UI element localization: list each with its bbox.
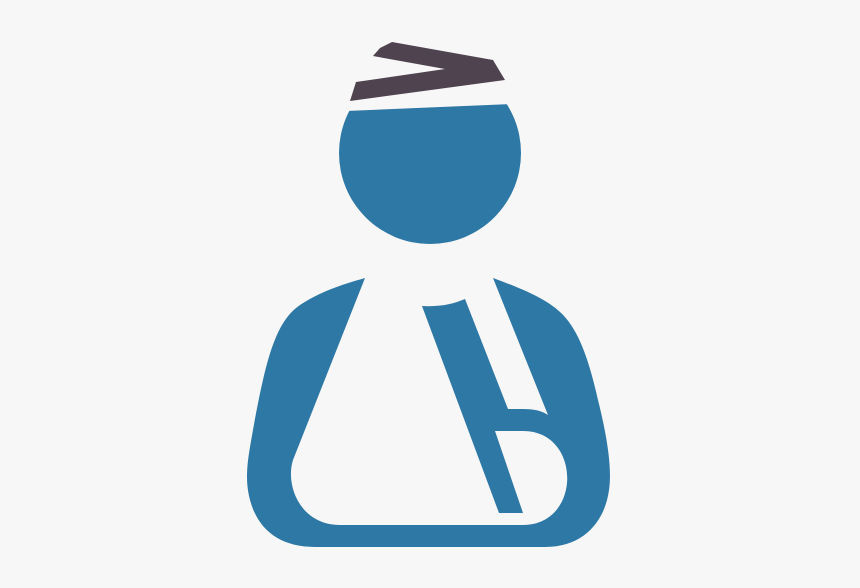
arm sling xyxy=(291,278,567,525)
icon: injured person with bandage and arm sling xyxy=(247,42,610,547)
body xyxy=(247,278,610,547)
head xyxy=(339,104,521,244)
bandage xyxy=(350,42,505,101)
